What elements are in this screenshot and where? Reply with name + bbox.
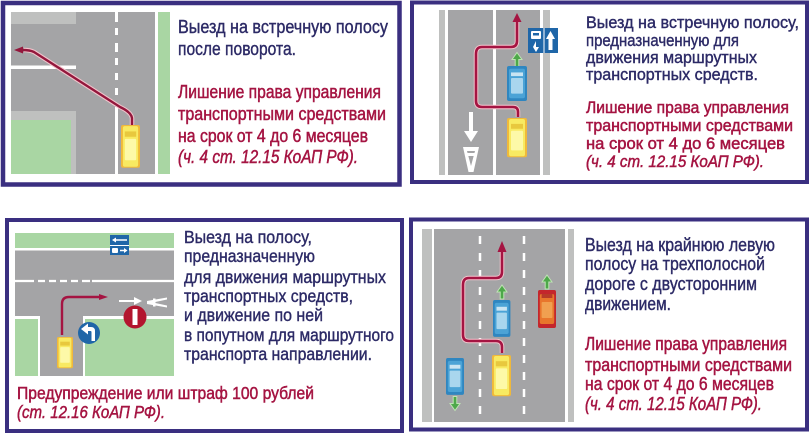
red car xyxy=(538,290,556,328)
icon: bus lane sign xyxy=(528,28,558,53)
penalty text: (ч. 4 ст. 12.15 КоАП РФ). xyxy=(178,147,358,167)
penalty text: Лишение права управления xyxy=(585,334,787,354)
penalty text: на срок от 4 до 6 месяцев xyxy=(178,126,368,146)
offence text: и движение по ней xyxy=(184,305,323,325)
panel 3 frame xyxy=(7,220,402,431)
blue car xyxy=(507,66,527,101)
green arrow ahead of blue car xyxy=(512,52,522,66)
green arrow ahead of blue car xyxy=(497,285,507,299)
penalty text: (ст. 12.16 КоАП РФ). xyxy=(17,402,165,422)
offence text: в попутном для маршрутного xyxy=(184,325,394,345)
offence text line 2: после поворота. xyxy=(178,39,296,59)
road diagram: two-way road xyxy=(439,10,550,175)
penalty text xyxy=(586,99,793,171)
road diagram: T-junction xyxy=(11,12,170,174)
icon: no entry sign xyxy=(124,306,146,328)
penalty text: Лишение права управления xyxy=(178,82,381,102)
offence text: дороге с двусторонним xyxy=(585,274,757,294)
penalty text: Предупреждение или штраф 100 рублей xyxy=(17,383,314,403)
offence text: движением. xyxy=(585,294,671,314)
icon: bus lane direction sign xyxy=(110,235,129,255)
road diagram: three-lane road xyxy=(422,229,574,422)
yellow car xyxy=(507,118,527,157)
offence text: полосу на трехполосной xyxy=(585,254,765,274)
road diagram: junction with bus lane xyxy=(15,233,174,376)
offence text: движения маршрутных xyxy=(586,49,758,67)
penalty text: транспортными средствами xyxy=(585,355,792,375)
offence text: Выезд на встречную полосу, xyxy=(586,14,799,32)
penalty text: (ч. 4 ст. 12.15 КоАП РФ). xyxy=(585,394,762,414)
yellow car xyxy=(57,337,73,368)
bus lane road marking xyxy=(463,112,479,172)
offence text: Выезд на полосу, xyxy=(184,227,312,247)
panel: exit to far-left lane on three-lane road xyxy=(411,220,807,430)
penalty text: (ч. 4 ст. 12.15 КоАП РФ). xyxy=(586,153,764,171)
offence text: транспорта направлении. xyxy=(184,344,372,364)
offence text: транспортных средств, xyxy=(184,286,353,306)
green arrow ahead of red car xyxy=(542,275,552,289)
panel 4 frame xyxy=(411,220,807,430)
offence text: для движения маршрутных xyxy=(184,267,386,287)
penalty text: Лишение права управления xyxy=(586,99,789,117)
red route arrow xyxy=(463,241,506,353)
offence text xyxy=(585,235,775,314)
panel 2 frame xyxy=(412,2,807,182)
red route arrow xyxy=(14,46,132,125)
penalty text: на срок от 4 до 6 месяцев xyxy=(585,374,774,394)
road marking: bus lane arrow xyxy=(119,297,167,308)
panel: entering bus lane and driving with its flow xyxy=(7,220,402,431)
penalty text xyxy=(17,383,314,422)
red route arrow xyxy=(476,13,522,117)
blue car, middle lane xyxy=(493,300,510,337)
green arrow below oncoming car xyxy=(450,396,460,410)
yellow car xyxy=(121,125,140,168)
penalty text: на срок от 4 до 6 месяцев xyxy=(586,135,785,153)
offence text: предназначенную для xyxy=(586,32,739,50)
red route arrow xyxy=(62,294,108,335)
offence text: предназначенную xyxy=(184,246,315,266)
offence text: Выезд на встречную полосу xyxy=(178,17,388,37)
penalty text: транспортными средствами xyxy=(586,117,793,135)
offence text xyxy=(184,227,394,364)
offence text: Выезд на крайнюю левую xyxy=(585,235,775,255)
offence text: транспортных средств. xyxy=(586,66,758,84)
icon: left-turn sign xyxy=(78,322,100,344)
panel: exit into oncoming lane after a turn xyxy=(3,3,400,184)
yellow car xyxy=(492,355,511,396)
penalty text: транспортными средствами xyxy=(178,104,386,124)
offence text xyxy=(586,14,799,84)
panel 1 frame xyxy=(3,3,400,184)
penalty text xyxy=(178,82,386,167)
oncoming blue car xyxy=(446,358,464,395)
penalty text xyxy=(585,334,792,414)
panel: exit into oncoming bus lane xyxy=(412,2,807,182)
